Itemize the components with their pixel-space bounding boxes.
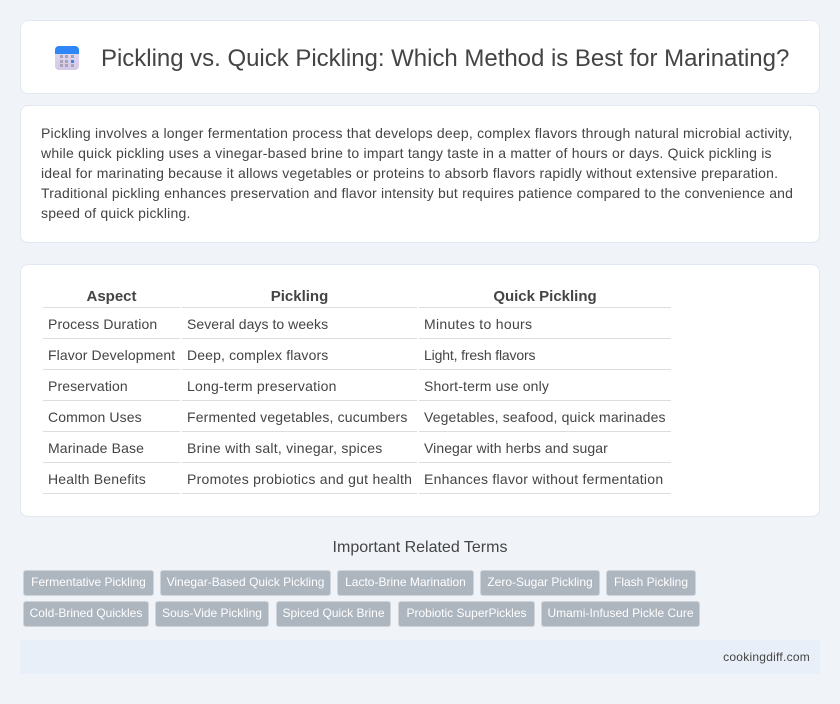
table header: Quick Pickling (493, 288, 597, 305)
panel: comparison table (20, 264, 820, 517)
related terms heading: Important Related Terms (333, 539, 507, 556)
table row: preservation: Preservation (48, 378, 128, 394)
tag: Vinegar-Based Quick Pickling (167, 575, 324, 589)
table row: health benefits (43, 471, 671, 494)
title: Pickling vs. Quick Pickling: Which Method is Best for Marinating? (101, 45, 789, 72)
table header: Aspect (86, 288, 137, 305)
table row: common uses: Vegetables, seafood, quick marinades (424, 409, 666, 425)
tag (23, 601, 149, 627)
table header: Pickling (271, 288, 328, 305)
tag (155, 601, 269, 627)
table row: common uses: Common Uses (48, 409, 142, 425)
tag: Umami-Infused Pickle Cure (547, 606, 694, 620)
tag: Zero-Sugar Pickling (487, 575, 593, 589)
intro paragraph: Pickling involves a longer fermentation process that develops deep, complex flavors through natural microbial activity, (41, 125, 793, 141)
intro paragraph: while quick pickling uses a vinegar-based brine to impart tangy taste in a matter of hours or days. Quick pickling is (41, 145, 772, 161)
intro paragraph: ideal for marinating because it allows vegetables or proteins to absorb flavors rapidly without extensive preparation. (41, 165, 778, 181)
tag: Fermentative Pickling (31, 575, 146, 589)
table row: common uses: Fermented vegetables, cucumbers (187, 409, 408, 425)
tag: Spiced Quick Brine (282, 606, 385, 620)
tag (160, 570, 331, 596)
tag (480, 570, 600, 596)
tag: Cold-Brined Quickles (30, 606, 142, 620)
table row: marinade base (43, 440, 671, 463)
intro paragraph (41, 125, 793, 221)
table row: flavor development (43, 347, 671, 370)
tag: Probiotic SuperPickles (406, 606, 527, 620)
icon: calendar (55, 46, 79, 70)
tag (23, 570, 154, 596)
table row: flavor development: Deep, complex flavors (187, 347, 328, 363)
table row: health benefits: Health Benefits (48, 471, 146, 487)
footer source: cookingdiff.com (723, 650, 810, 664)
table row: health benefits: Promotes probiotics and gut health (187, 471, 412, 487)
tag (398, 601, 535, 627)
table row: marinade base: Vinegar with herbs and sugar (424, 440, 608, 456)
footer (20, 640, 820, 674)
table row: health benefits: Enhances flavor without fermentation (424, 471, 663, 487)
tag (606, 570, 696, 596)
tag (276, 601, 391, 627)
table row: process duration: Process Duration (48, 316, 157, 332)
intro paragraph: Traditional pickling enhances preservation and flavor intensity but requires patience compared to the convenience and (41, 185, 793, 201)
table row: preservation: Long-term preservation (187, 378, 337, 394)
table row: marinade base: Marinade Base (48, 440, 144, 456)
tag: Sous-Vide Pickling (162, 606, 262, 620)
table header (43, 288, 671, 308)
table row: preservation (43, 378, 671, 401)
panel: header (20, 20, 820, 94)
table row: process duration (43, 316, 671, 339)
table row: flavor development: Flavor Development (48, 347, 175, 363)
tag: Flash Pickling (614, 575, 688, 589)
table row: process duration: Several days to weeks (187, 316, 328, 332)
panel: related term tags (23, 570, 700, 627)
table row: common uses (43, 409, 671, 432)
table row: flavor development: Light, fresh flavors (424, 347, 535, 363)
table row: process duration: Minutes to hours (424, 316, 532, 332)
tag (337, 570, 474, 596)
table row: marinade base: Brine with salt, vinegar, spices (187, 440, 383, 456)
intro paragraph: speed of quick pickling. (41, 205, 191, 221)
panel: intro text (20, 105, 820, 243)
tag (541, 601, 700, 627)
table row: preservation: Short-term use only (424, 378, 549, 394)
tag: Lacto-Brine Marination (345, 575, 466, 589)
